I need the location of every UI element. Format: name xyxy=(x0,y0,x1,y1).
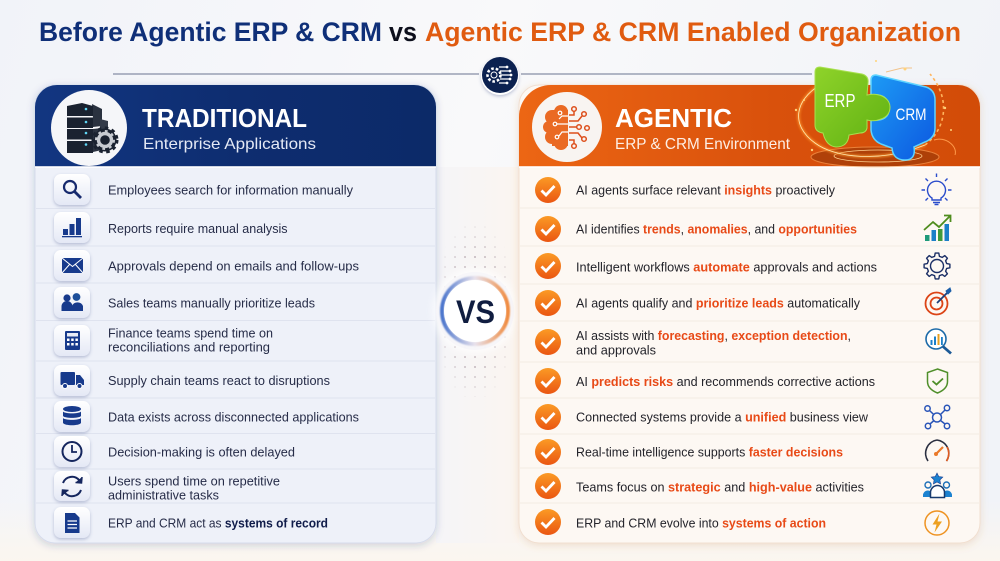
icon: document xyxy=(65,513,80,533)
icon: light bulb xyxy=(922,174,952,204)
row: repetitive tasks: Users spend time on repetitive xyxy=(108,474,280,488)
puzzle piece: CRM: CRM xyxy=(896,105,926,124)
icon: people xyxy=(62,293,83,311)
title xyxy=(39,17,961,47)
title: Agentic ERP & CRM Enabled Organization xyxy=(425,17,961,47)
row: risks: AI predicts risks and recommends corrective actions xyxy=(576,374,875,389)
row: leads: AI agents qualify and prioritize leads automatically xyxy=(576,296,860,310)
row: insights: AI agents surface relevant insights proactively xyxy=(576,182,835,198)
row: reports: Reports require manual analysis xyxy=(108,221,288,236)
icon: refresh arrows xyxy=(62,477,82,496)
row: systems of action: ERP and CRM evolve into systems of action xyxy=(576,516,826,530)
row: search xyxy=(54,174,353,205)
traditional header xyxy=(35,85,436,168)
row: finance: Finance teams spend time on xyxy=(108,326,273,340)
icon: target xyxy=(926,288,951,314)
icon: speedometer xyxy=(926,440,949,461)
icon: clock xyxy=(62,442,82,461)
icon: database xyxy=(63,406,81,425)
row: leads xyxy=(535,288,951,316)
row: sales xyxy=(54,287,315,318)
graphic: ERP CRM puzzle with glowing rings xyxy=(795,60,955,167)
VS badge xyxy=(433,269,517,353)
row: forecasting: AI assists with forecasting, exception detection, xyxy=(576,328,851,343)
row: systems of record: ERP and CRM act as systems of record xyxy=(108,516,328,530)
title: vs xyxy=(389,17,417,47)
row: insights xyxy=(535,174,952,204)
icon: AI brain xyxy=(532,92,602,162)
row: workflows xyxy=(535,253,950,279)
row: reports xyxy=(54,212,288,243)
icon: network nodes xyxy=(925,405,950,429)
row: decisions xyxy=(54,436,295,467)
icon: chart magnifier xyxy=(926,329,951,354)
row: risks xyxy=(535,368,948,394)
row: supply chain: Supply chain teams react to disruptions xyxy=(108,373,330,388)
check badge xyxy=(535,177,561,203)
row: decisions: Decision-making is often delayed xyxy=(108,444,295,460)
row: forecasting xyxy=(535,328,951,358)
row: faster decisions xyxy=(535,439,949,465)
row: systems of record xyxy=(54,507,328,538)
row: repetitive tasks xyxy=(54,471,280,502)
icon: truck xyxy=(60,372,84,388)
traditional subheading: Enterprise Applications xyxy=(143,136,316,153)
icon: gear xyxy=(924,253,950,279)
panel: traditional xyxy=(35,85,436,543)
row: sales: Sales teams manually prioritize leads xyxy=(108,296,315,310)
row: trends: AI identifies trends, anomalies, and opportunities xyxy=(576,222,857,236)
row: unified view: Connected systems provide a unified business view xyxy=(576,410,869,424)
icon: growth chart xyxy=(924,216,950,241)
row: workflows: Intelligent workflows automate approvals and actions xyxy=(576,260,877,274)
icon: lightning xyxy=(925,511,949,535)
puzzle piece: ERP: ERP xyxy=(824,91,856,111)
VS halftone dots xyxy=(444,226,506,397)
icon: shield xyxy=(928,369,948,393)
icon: team with star xyxy=(923,473,952,498)
icon: server stack with gear xyxy=(51,90,127,166)
icon: calculator xyxy=(65,331,80,350)
row dividers xyxy=(36,208,435,503)
row: forecasting: and approvals xyxy=(576,342,656,358)
agentic header xyxy=(519,85,980,168)
puzzle piece: ERP xyxy=(815,67,890,147)
row: finance xyxy=(54,325,273,356)
icon: magnifier xyxy=(64,181,81,198)
puzzle piece: CRM xyxy=(871,75,935,160)
agentic subheading: ERP & CRM Environment xyxy=(615,136,791,153)
icon: envelope xyxy=(62,258,83,273)
icon: bar chart xyxy=(62,218,82,237)
row: supply chain xyxy=(54,365,330,396)
title divider with badge xyxy=(113,57,812,95)
row: strategic: Teams focus on strategic and high-value activities xyxy=(576,480,864,494)
row: strategic xyxy=(535,473,952,499)
title: Before Agentic ERP & CRM xyxy=(39,17,382,47)
row dividers xyxy=(520,208,979,503)
row: approvals xyxy=(54,250,359,281)
agentic heading: AGENTIC xyxy=(615,103,732,133)
panel: agentic xyxy=(519,60,980,543)
VS badge: VS xyxy=(456,294,495,330)
row: search: Employees search for information manually xyxy=(108,182,353,198)
row: unified view xyxy=(535,404,950,430)
row: systems of action xyxy=(535,509,949,535)
row: data: Data exists across disconnected applications xyxy=(108,410,359,424)
row: repetitive tasks: administrative tasks xyxy=(108,488,219,502)
row: trends xyxy=(535,216,950,242)
row: approvals: Approvals depend on emails and follow-ups xyxy=(108,258,359,274)
traditional heading: TRADITIONAL xyxy=(142,103,307,133)
row: faster decisions: Real-time intelligence supports faster decisions xyxy=(576,444,843,460)
row: data xyxy=(54,401,359,432)
row: finance: reconciliations and reporting xyxy=(108,340,270,354)
